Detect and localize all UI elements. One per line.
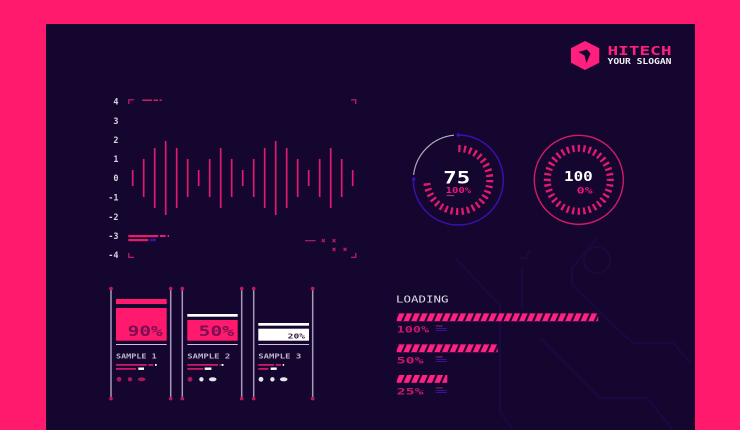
mini bars <box>187 364 221 370</box>
waveform bars <box>133 141 353 215</box>
logo <box>571 41 672 70</box>
logo slogan: YOUR SLOGAN <box>608 57 672 66</box>
background circuit pattern <box>455 238 690 430</box>
panel: sample 2 <box>180 287 244 400</box>
gauge percent: 100% <box>446 186 472 195</box>
label 25: 25% <box>397 387 425 397</box>
bottom left status bars <box>128 235 169 241</box>
panel: sample 1 <box>109 287 172 400</box>
side rails <box>111 288 171 399</box>
sample label: SAMPLE 3 <box>258 352 301 360</box>
gauge ticks <box>546 147 611 212</box>
gauge ring <box>534 135 623 224</box>
gauge value: 100 <box>564 170 593 185</box>
icons <box>117 377 146 382</box>
gauge ticks <box>427 148 490 212</box>
chart: waveform <box>108 98 356 261</box>
label 50: 50% <box>397 356 425 366</box>
icon: hexagon logo mark <box>571 41 599 70</box>
progress bar 50 <box>397 344 498 352</box>
icons <box>259 377 288 382</box>
logo name: HITECH <box>608 44 672 58</box>
header bar <box>116 299 167 304</box>
y axis labels: 0 <box>113 174 118 184</box>
y axis labels: -2 <box>108 213 118 223</box>
level value: 20% <box>288 332 306 340</box>
gauge small dash <box>447 194 454 197</box>
y axis labels: 1 <box>113 155 118 165</box>
progress bar 100 <box>397 313 598 321</box>
gauge ring white <box>414 135 454 175</box>
x marks <box>305 239 346 251</box>
panel: sample 3 <box>252 287 315 400</box>
gauge: 100 <box>534 135 623 224</box>
sample label: SAMPLE 1 <box>116 352 157 360</box>
level fill <box>187 320 238 341</box>
y axis labels: -3 <box>108 232 118 242</box>
label 100: 100% <box>397 325 430 335</box>
gauge: 75 <box>412 133 503 225</box>
gauge value: 75 <box>443 168 470 188</box>
y axis labels: -1 <box>108 194 118 204</box>
progress bar 25 <box>397 375 447 383</box>
tiny marks 25 <box>436 388 447 393</box>
gauge percent: 0% <box>577 186 594 196</box>
y axis labels: 4 <box>113 98 118 108</box>
top dashes <box>142 99 162 101</box>
side rails <box>254 288 313 399</box>
y axis labels <box>108 98 118 261</box>
mini bars <box>258 364 281 370</box>
level fill <box>116 308 167 341</box>
side rails <box>182 288 242 399</box>
gauge ring blue <box>413 135 503 225</box>
loading heading: LOADING <box>396 294 449 305</box>
mini bars <box>116 364 153 370</box>
icons <box>188 377 216 382</box>
level value: 50% <box>199 324 235 340</box>
level fill <box>258 329 309 341</box>
y axis labels: 2 <box>113 136 118 146</box>
y axis labels: 3 <box>113 117 118 127</box>
gauge end dots <box>412 133 460 181</box>
header bar <box>258 323 309 326</box>
header bar <box>187 314 238 317</box>
baseline <box>187 344 238 345</box>
y axis labels: -4 <box>108 251 118 261</box>
panel: loading <box>396 294 598 397</box>
baseline <box>116 344 167 345</box>
corner brackets <box>129 100 356 257</box>
tiny marks 100 <box>436 326 447 331</box>
tiny marks 50 <box>436 356 447 362</box>
level value: 90% <box>128 324 163 340</box>
baseline <box>258 344 309 345</box>
sample label: SAMPLE 2 <box>187 352 230 360</box>
